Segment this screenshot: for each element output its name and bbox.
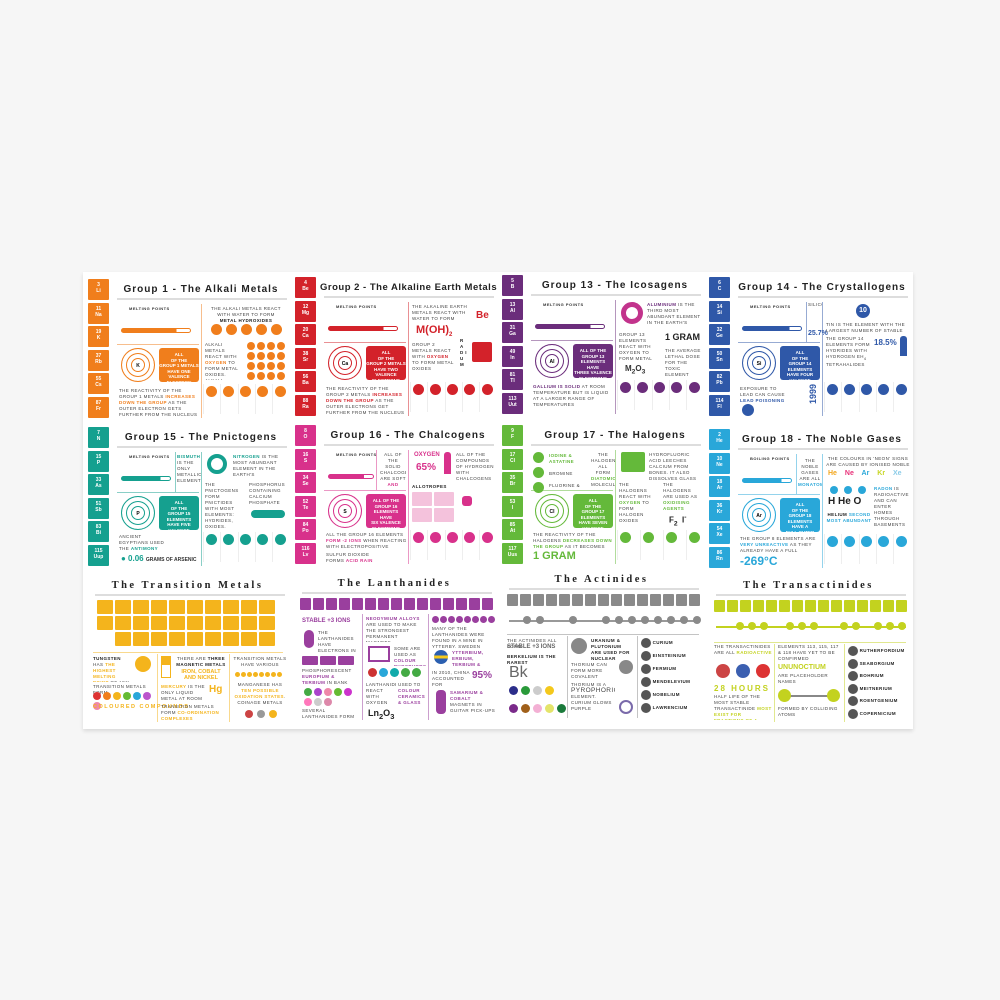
element tiles: Rn: [716, 556, 723, 562]
valence box: GROUP 2 METALS: [366, 361, 406, 366]
heading: Group 18 - The Noble Gases: [742, 434, 902, 445]
panel: group 13 icosagens: MELTING POINTS: [543, 302, 584, 307]
element tiles: Uut: [508, 402, 517, 408]
element tiles: [502, 275, 523, 414]
element tiles: 115: [94, 548, 103, 554]
element tiles: 117: [508, 546, 517, 552]
element tiles: K: [97, 335, 100, 341]
panel: transactinides: FORMED BY COLLIDING ATOMS: [778, 706, 838, 717]
panel: group 15 pnictogens: ● 0.06 GRAMS OF ARSENIC: [121, 554, 197, 563]
element tiles: Sb: [95, 506, 102, 512]
panel: group 14 crystallogens: MELTING POINTS: [750, 304, 791, 309]
heading: Group 13 - The Icosagens: [542, 280, 688, 291]
heading: The Transactinides: [743, 580, 874, 591]
portraits list: EINSTEINIUM: [653, 653, 686, 658]
element tiles: Bi: [96, 530, 101, 536]
element tiles: 13: [510, 302, 515, 308]
atom diagram: P: [136, 511, 140, 517]
panel: actinides: STABLE +3 IONS: [507, 644, 555, 650]
portraits list: ROENTGENIUM: [860, 698, 898, 703]
element tiles: 34: [303, 475, 308, 481]
panel: group 17 halogens: IODINE & ASTATINE: [549, 453, 574, 464]
portraits list: MENDELEVIUM: [653, 679, 690, 684]
element tiles: Ca: [302, 333, 309, 339]
element tiles: [709, 429, 730, 568]
portraits list: COPERNICIUM: [860, 711, 896, 716]
element tiles: He: [716, 438, 723, 444]
heading: Group 1 - The Alkali Metals: [124, 284, 278, 295]
panel: group 14 crystallogens: 25.7%: [808, 330, 828, 337]
valence box: [780, 498, 820, 532]
panel: group 14 crystallogens: [709, 277, 908, 416]
element tiles: 7: [97, 430, 100, 436]
valence box: ALL: [175, 352, 183, 357]
melting point bar: [328, 326, 398, 331]
atom diagram: [328, 346, 362, 380]
element tiles: 32: [717, 327, 722, 333]
element tiles: Ge: [716, 333, 723, 339]
portraits list: [848, 646, 905, 719]
atom diagram: [742, 498, 776, 532]
element tiles: 113: [508, 396, 517, 402]
uses icons: [824, 534, 907, 564]
element tiles: Si: [717, 310, 722, 316]
element tiles: 86: [717, 550, 722, 556]
panel: transition metals: COLOURED COMPOUNDS: [93, 704, 189, 710]
melting point bar: [121, 476, 171, 481]
element tiles: 81: [510, 372, 515, 378]
element tiles: 84: [303, 522, 308, 528]
melting point bar: [535, 324, 605, 329]
valence box: GROUP 17 ELEMENTS: [581, 509, 605, 520]
panel: actinides: Bk: [509, 664, 528, 681]
panel: group 18 noble gases: HELIUM SECOND MOST ABUNDANT: [827, 512, 871, 523]
gallium text: GALLIUM IS SOLID AT ROOM TEMPERATURE BUT IS LIQUID AT A LARGER RANGE OF TEMPERATURES: [533, 384, 609, 407]
portraits list: MEITNERIUM: [860, 686, 892, 691]
valence box: ALL OF THE: [373, 498, 399, 503]
element tiles: 85: [510, 522, 515, 528]
valence box: ALL: [382, 350, 390, 355]
element tiles: Rb: [95, 358, 102, 364]
element tiles: C: [718, 286, 721, 292]
element tiles: 88: [303, 398, 308, 404]
melting point bar: [742, 326, 802, 331]
element tiles: 35: [510, 475, 515, 481]
valence box: HAVE ONE: [167, 368, 191, 374]
atom diagram: [328, 494, 362, 528]
element tiles: 38: [303, 350, 308, 356]
valence box: OF THE: [585, 504, 601, 508]
panel: lanthanides: IN 2010, CHINA ACCOUNTED FOR: [432, 670, 470, 687]
portraits list: SEABORGIUM: [860, 661, 895, 666]
valence box: OF THE: [378, 356, 394, 360]
valence box: OF THE: [792, 508, 808, 512]
element tiles: [88, 427, 109, 566]
panel: group 14 crystallogens: 10: [859, 307, 867, 314]
panel: group 17 halogens: [502, 425, 701, 564]
element tiles: 114: [715, 398, 724, 404]
uses icons: [824, 382, 907, 412]
heading: Group 16 - The Chalcogens: [330, 430, 486, 441]
valence box: HAVE TWO: [374, 366, 398, 372]
element tiles: As: [95, 483, 102, 489]
element tiles: 2: [718, 432, 721, 438]
uses icons: [203, 384, 286, 414]
element tiles: Se: [302, 481, 309, 487]
panel: group 16 chalcogens: [295, 425, 494, 564]
atom diagram: Ar: [756, 513, 762, 519]
portraits list: BOHRIUM: [860, 673, 884, 678]
panel: transition metals: TRANSITION METALS FORM: [93, 684, 146, 695]
heading: The Lanthanides: [338, 578, 451, 589]
element tiles: 55: [96, 376, 101, 382]
panel: group 2 alkaline earth metals: GROUP 2 METALS REACT WITH OXYGEN TO FORM METAL OXIDES: [412, 342, 454, 371]
uses icons: [203, 532, 286, 562]
element row: [300, 598, 493, 610]
valence box: OF THE: [171, 506, 187, 510]
portraits list: CURIUM: [653, 640, 673, 645]
valence box: GROUP 14 ELEMENTS: [788, 361, 812, 372]
element tiles: 49: [510, 348, 515, 354]
panel: group 1 alkali metals: THE ALKALI METALS REACT WITH WATER TO FORM: [211, 306, 281, 317]
element tiles: Sr: [303, 356, 308, 362]
element tiles: 12: [303, 304, 308, 310]
panel: group 1 alkali metals: MELTING POINTS: [129, 306, 170, 311]
uses icons: [410, 530, 493, 560]
panel: transactinides: ELEMENTS 113, 115, 117 & 118 HAVE YET TO BE CONFIRMED: [778, 644, 839, 661]
portraits list: NOBELIUM: [653, 692, 680, 697]
panel: group 15 pnictogens: MELTING POINTS: [129, 454, 170, 459]
panel: actinides: THE ACTINIDES ALL FORM: [507, 638, 557, 649]
valence box: GROUP 15 ELEMENTS: [167, 511, 191, 522]
panel: lanthanides: USED TO COLOUR CERAMICS & GLASS: [398, 682, 425, 705]
heading: Group 17 - The Halogens: [544, 430, 686, 441]
atom diagram: Ca: [342, 361, 348, 367]
uses icons: [410, 382, 493, 412]
panel: lanthanides: [300, 578, 495, 721]
valence box: HAVE A: [792, 524, 808, 529]
panel: lanthanides: STABLE +3 IONS: [302, 618, 350, 624]
valence box: HAVE: [587, 364, 599, 370]
valence box: GROUP 16 ELEMENTS: [374, 504, 398, 514]
element tiles: 116: [301, 546, 310, 552]
portraits list: FERMIUM: [653, 666, 676, 671]
element tiles: Br: [510, 481, 515, 487]
element tiles: O: [304, 434, 307, 440]
heading: Group 14 - The Crystallogens: [738, 282, 906, 293]
panel: group 2 alkaline earth metals: M(OH)2: [416, 324, 452, 338]
atom diagram: Cl: [550, 509, 554, 515]
element tiles: 82: [717, 374, 722, 380]
element tiles: B: [511, 284, 514, 290]
panel: group 14 crystallogens: 1999: [808, 384, 818, 404]
element tiles: Xe: [716, 532, 723, 538]
element tiles: 16: [303, 452, 308, 458]
element tiles: 54: [717, 526, 722, 532]
element tiles: 20: [303, 327, 308, 333]
element tiles: [709, 277, 730, 416]
panel: group 18 noble gases: BOILING POINTS: [750, 456, 790, 461]
atom diagram: Si: [757, 361, 761, 367]
element tiles: [295, 277, 316, 416]
atom diagram: Al: [550, 359, 554, 365]
panel: transition metals: Hg: [209, 684, 222, 695]
uses icons: [617, 530, 700, 560]
timeline: [716, 626, 906, 628]
heading: The Transition Metals: [112, 580, 263, 591]
element tiles: 31: [510, 325, 515, 331]
element tiles: 14: [717, 304, 722, 310]
panel: group 17 halogens: 1 GRAM: [533, 550, 576, 562]
panel: group 18 noble gases: RADON IS RADIOACTIVE AND CAN ENTER HOMES THROUGH BASEMENTS: [874, 486, 909, 526]
element tiles: Fl: [717, 404, 722, 410]
panel: group 16 chalcogens: SULFUR DIOXIDE FORMS ACID RAIN: [326, 552, 373, 563]
heading: Group 15 - The Pnictogens: [125, 432, 277, 443]
reactivity text: THE REACTIVITY OF THE GROUP 2 METALS INCREASES DOWN THE GROUP AS THE OUTER ELECTRONS GET FURTHER FROM THE NUCLEUS: [326, 386, 404, 415]
panel: transition metals: IRON, COBALT AND NICKEL: [181, 669, 221, 681]
element tiles: S: [304, 458, 307, 464]
element tiles: In: [510, 354, 515, 360]
panel: group 16 chalcogens: MELTING POINTS: [336, 452, 377, 457]
element tiles: 36: [717, 502, 722, 508]
element tiles: Po: [302, 528, 309, 534]
element tiles: I: [512, 504, 513, 510]
element tiles: 9: [511, 428, 514, 434]
valence box: ALL OF THE: [580, 348, 606, 353]
atom diagram: [121, 496, 155, 530]
panel: group 14 crystallogens: EXPOSURE TO LEAD CAN CAUSE LEAD POISONING: [740, 386, 785, 403]
element tiles: Cs: [95, 382, 102, 388]
element tiles: F: [511, 434, 514, 440]
element tiles: [502, 425, 523, 564]
boiling point bar: [742, 478, 792, 483]
panel: group 18 noble gases: [709, 429, 910, 568]
icon: radioactive: [472, 342, 492, 362]
valence box: [573, 344, 613, 378]
portraits list: RUTHERFORDIUM: [860, 648, 905, 653]
panel: group 18 noble gases: H He O: [828, 496, 861, 507]
panel: group 2 alkaline earth metals: [295, 277, 497, 416]
panel: group 18 noble gases: -269°C: [740, 554, 777, 568]
reactivity text: THE REACTIVITY OF THE GROUP 1 METALS INCREASES DOWN THE GROUP AS THE OUTER ELECTRON GETS FURTHER FROM THE NUCLEUS: [119, 388, 197, 417]
melting point bar: [328, 474, 374, 479]
element tiles: Ne: [716, 462, 723, 468]
valence box: OF THE: [171, 358, 187, 362]
valence box: [159, 496, 199, 530]
panel: group 2 alkaline earth metals: Be: [476, 310, 489, 321]
panel: transactinides: UNUNOCTIUM: [778, 664, 826, 671]
panel: lanthanides: Ln2O3: [368, 708, 394, 721]
valence box: SIX VALENCE: [371, 520, 401, 525]
heading: Group 2 - The Alkaline Earth Metals: [320, 282, 497, 293]
panel: transition metals: MANGANESE HAS TEN POSSIBLE OXIDATION STATES. COINAGE METALS: [234, 682, 286, 705]
panel: group 14 crystallogens: 18.5%: [874, 338, 897, 347]
element tiles: 19: [96, 329, 101, 335]
element tiles: 10: [717, 456, 722, 462]
poster sheet: [83, 272, 913, 729]
element tiles: 6: [718, 280, 721, 286]
atom diagram: [535, 344, 569, 378]
panel: actinides: BERKELIUM IS THE RAREST: [507, 654, 556, 665]
valence box: ALL: [589, 498, 597, 503]
element tiles: At: [510, 528, 515, 534]
element tiles: Uup: [94, 554, 103, 560]
panel: lanthanides: 95%: [472, 670, 492, 681]
atom diagram: [121, 348, 155, 382]
element tiles: Pb: [716, 380, 723, 386]
element tiles: 11: [96, 306, 101, 312]
panel: group 13 icosagens: [502, 275, 701, 414]
element tiles: 17: [510, 452, 515, 458]
element tiles: Ga: [509, 331, 516, 337]
panel: transactinides: THE TRANSACTINIDES ARE ALL RADIOACTIVE: [714, 644, 772, 655]
panel: transactinides: [714, 580, 907, 722]
panel: transactinides: ARE PLACEHOLDER NAMES: [778, 673, 828, 684]
melting point bar: [121, 328, 191, 333]
element tiles: 33: [96, 477, 101, 483]
panel: transition metals: TRANSITION METALS FORM CO-ORDINATION COMPLEXES: [161, 704, 219, 721]
panel: group 16 chalcogens: ALLOTROPES: [412, 484, 447, 489]
portraits list: [641, 638, 690, 713]
element tiles: 37: [96, 352, 101, 358]
panel: group 2 alkaline earth metals: R A D I U M: [460, 338, 467, 367]
portraits list: LAWRENCIUM: [653, 705, 688, 710]
panel: group 14 crystallogens: THE GROUP 14 ELEMENTS FORM HYDRIDES WITH HYDROGEN EH4 TETRAHALIDES: [826, 336, 870, 367]
panel: actinides: [507, 574, 701, 718]
element tiles: Mg: [302, 310, 309, 316]
panel: group 2 alkaline earth metals: MELTING POINTS: [336, 304, 377, 309]
element tiles: 4: [304, 280, 307, 286]
heading: The Actinides: [554, 574, 649, 585]
element row: [507, 594, 700, 606]
panel: group 17 halogens: THE HALOGENS ARE USED AS OXIDISING AGENTS: [663, 482, 697, 511]
valence box: ALL: [175, 500, 183, 505]
element tiles: 5: [511, 278, 514, 284]
element row: [714, 600, 907, 612]
panel: transition metals: THERE ARE THREE MAGNETIC METALS: [176, 656, 226, 667]
element tiles: Fr: [96, 406, 101, 412]
valence box: [366, 346, 406, 380]
element tiles: [88, 279, 109, 418]
panel: group 17 halogens: BROMINE: [549, 471, 573, 476]
element tiles: 3: [97, 282, 100, 288]
atom diagram: [535, 494, 569, 528]
panel: group 1 alkali metals: [88, 279, 287, 418]
element tiles: Al: [510, 308, 515, 314]
element tiles: Sn: [716, 356, 723, 362]
panel: group 18 noble gases: He Ne Ar Kr Xe: [828, 470, 902, 477]
valence box: HAVE FOUR: [787, 372, 813, 377]
panel: transition metals: [93, 580, 286, 722]
element tiles: 56: [303, 374, 308, 380]
element tiles: Ar: [717, 485, 722, 491]
valence box: [159, 348, 199, 382]
valence box: HAVE: [380, 514, 392, 520]
donut: [621, 302, 643, 324]
element tiles: Tl: [510, 378, 515, 384]
panel: transactinides: 28 HOURS: [714, 684, 770, 693]
valence box: OF THE: [792, 356, 808, 360]
element tiles: [295, 425, 316, 564]
panel: group 16 chalcogens: OXYGEN: [414, 452, 440, 458]
valence box: GROUP 18 ELEMENTS: [788, 513, 812, 524]
element tiles: P: [97, 460, 100, 466]
valence box: HAVE FIVE: [167, 522, 191, 527]
element tiles: 87: [96, 400, 101, 406]
element tiles: 83: [96, 524, 101, 530]
element tiles: Li: [96, 288, 101, 294]
panel: lanthanides: SAMARIUM & COBALT MAGNETS IN GUITAR PICK-UPS: [450, 690, 495, 713]
valence box: [573, 494, 613, 528]
element tiles: Ra: [302, 404, 309, 410]
element tiles: Ba: [302, 380, 309, 386]
element tiles: Kr: [717, 508, 722, 514]
atom diagram: S: [343, 509, 347, 515]
panel: group 17 halogens: THE HALOGENS REACT WITH OXYGEN TO FORM HALOGEN OXIDES: [619, 482, 651, 523]
valence box: [780, 346, 820, 380]
valence box: GROUP 13 ELEMENTS: [581, 354, 605, 364]
element tiles: 8: [304, 428, 307, 434]
valence box: GROUP 1 METALS: [159, 363, 199, 368]
element tiles: Te: [303, 504, 308, 510]
panel: group 17 halogens: F2 I-: [669, 514, 686, 527]
valence box: HAVE SEVEN: [579, 520, 607, 525]
element tiles: 51: [96, 500, 101, 506]
element tiles: Cl: [510, 458, 515, 464]
element tiles: Uus: [508, 552, 517, 558]
atom diagram: [742, 346, 776, 380]
uses icons: [617, 380, 700, 410]
atom diagram: K: [136, 363, 140, 369]
element tiles: Na: [95, 312, 102, 318]
element tiles: Be: [302, 286, 309, 292]
valence box: THREE VALENCE: [574, 370, 612, 375]
element tiles: 50: [717, 350, 722, 356]
panel: group 13 icosagens: M2O3: [625, 364, 645, 376]
element grid: [97, 600, 275, 646]
panel: group 13 icosagens: 1 GRAM: [665, 332, 700, 342]
element tiles: Lv: [303, 552, 308, 558]
element tiles: 52: [303, 498, 308, 504]
timeline: [509, 620, 699, 622]
valence box: ALL: [796, 350, 804, 355]
valence box: [366, 494, 406, 528]
valence box: ALL: [796, 502, 804, 507]
panel: group 16 chalcogens: 65%: [416, 462, 436, 473]
element tiles: N: [97, 436, 100, 442]
element tiles: 15: [96, 454, 101, 460]
element tiles: 53: [510, 498, 515, 504]
element tiles: 18: [717, 479, 722, 485]
panel: group 15 pnictogens: [88, 427, 287, 566]
